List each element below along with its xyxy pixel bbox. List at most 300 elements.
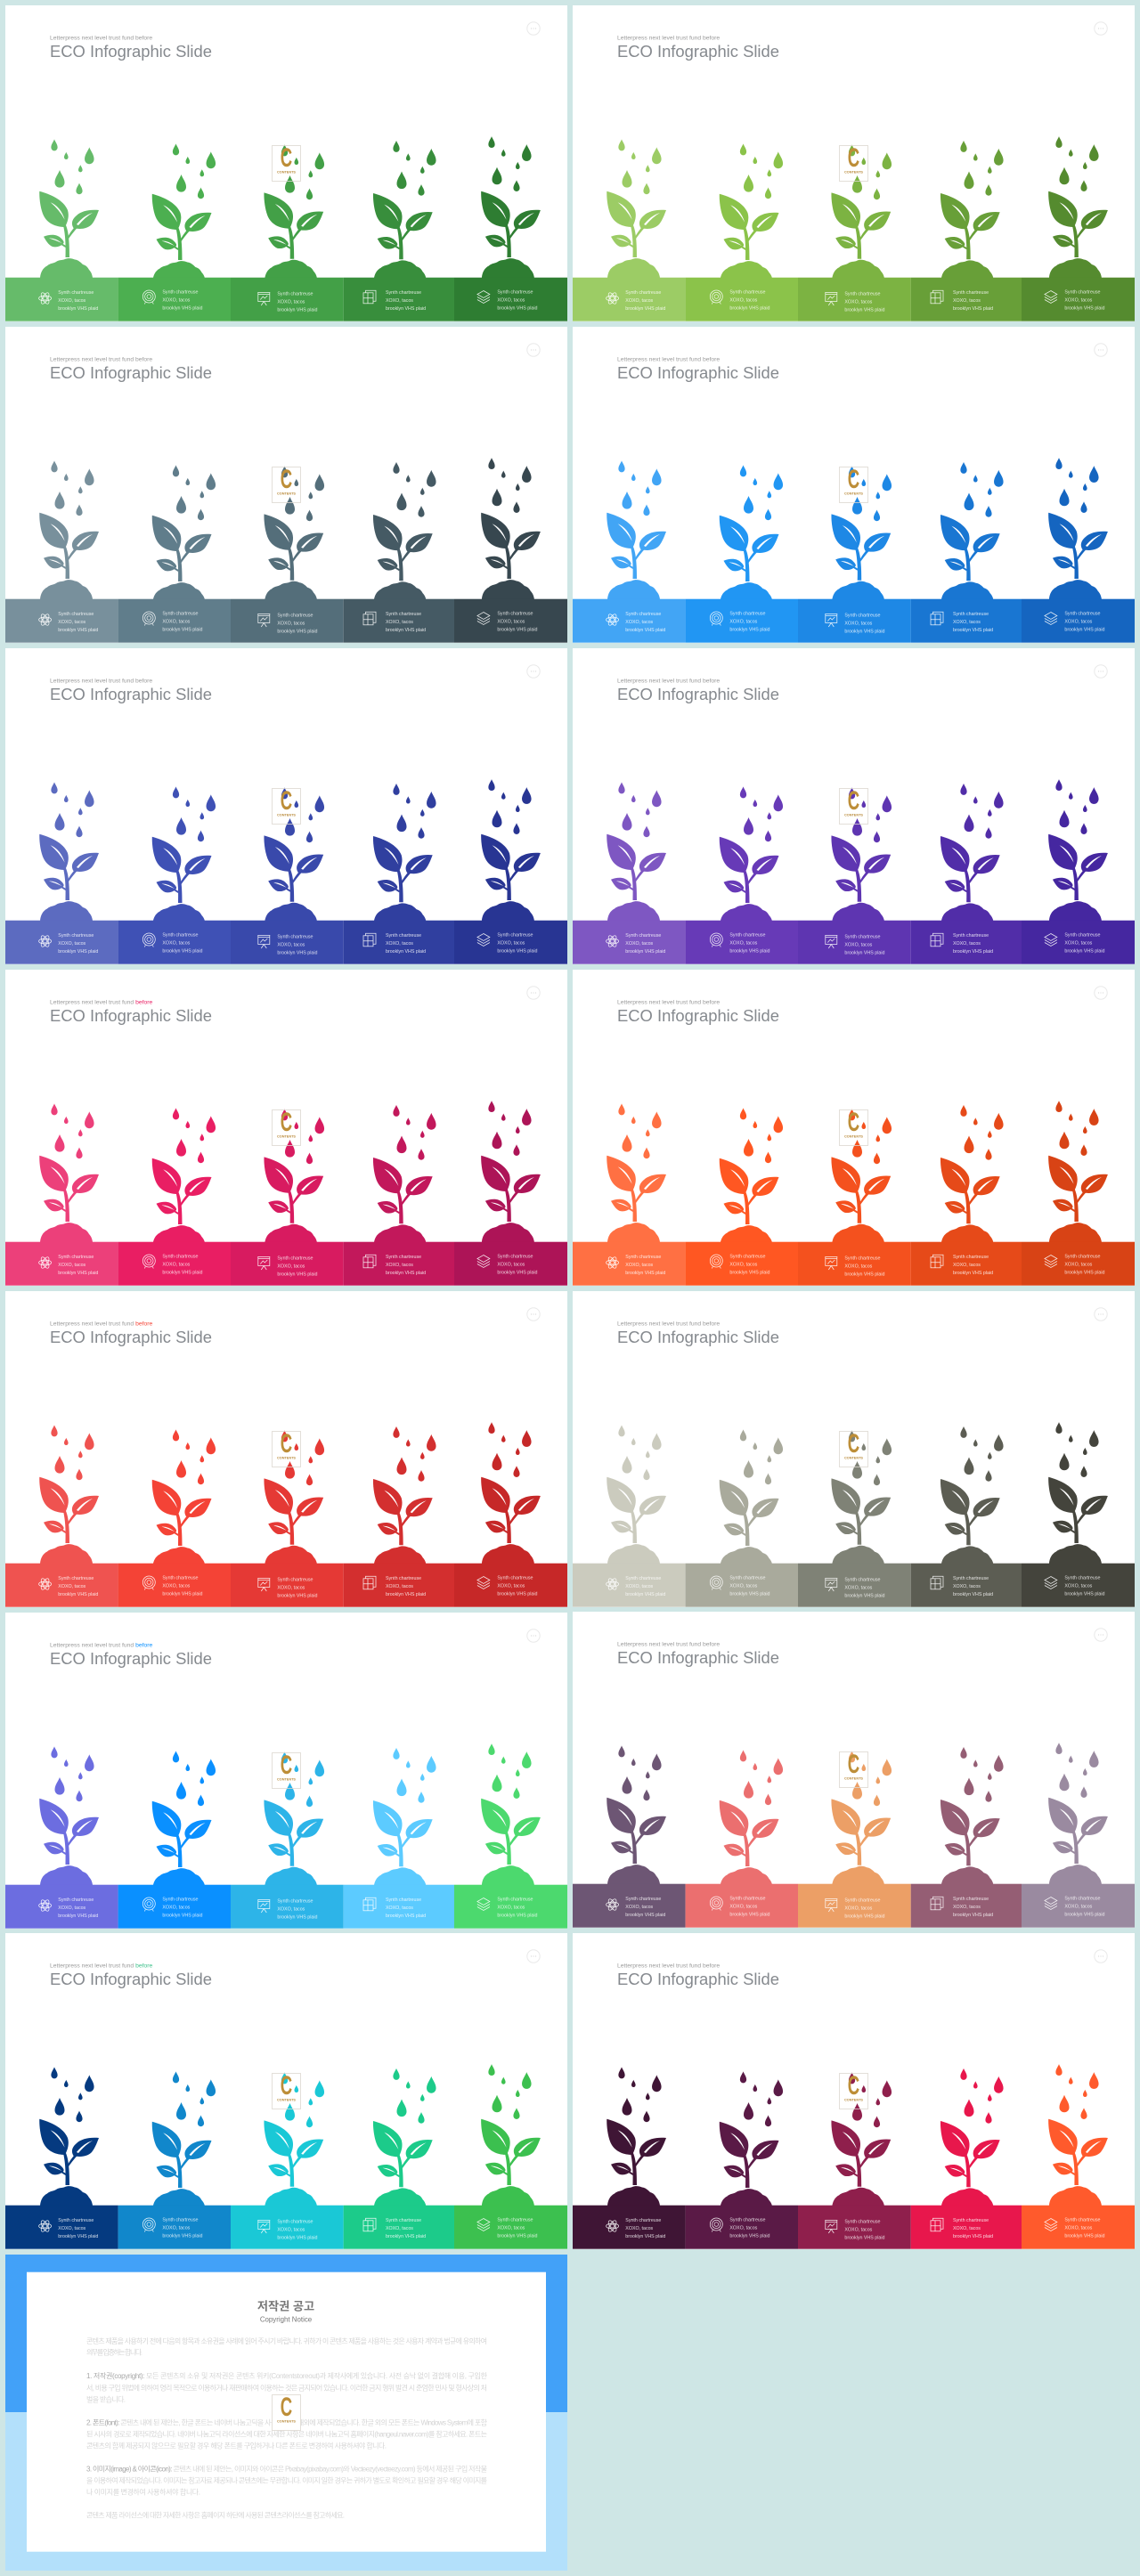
footer cell 2 xyxy=(118,599,231,643)
footer cell 2: brooklyn VHS plaid xyxy=(162,1270,203,1275)
footer cell 3 xyxy=(231,921,344,964)
footer cell 4: XOXO, tacos xyxy=(953,2226,981,2231)
footer cell 2: brooklyn VHS plaid xyxy=(729,1912,770,1917)
watermark xyxy=(273,465,301,502)
slide 7: pink xyxy=(5,970,567,1286)
watermark: C xyxy=(281,786,292,816)
footer cell 5: XOXO, tacos xyxy=(497,1262,525,1267)
footer cell 2: XOXO, tacos xyxy=(729,297,758,303)
footer cell 1: XOXO, tacos xyxy=(58,2226,86,2231)
footer cell 4: Synth chartreuse xyxy=(953,612,989,617)
plant 3 xyxy=(831,1109,892,1244)
footer cell 1: Synth chartreuse xyxy=(625,1576,661,1581)
plant 4 xyxy=(373,1105,436,1244)
footer cell 2: brooklyn VHS plaid xyxy=(729,948,770,954)
slide 12: muted plum and coral xyxy=(573,1612,1135,1928)
paragraph: images and icons: 을 이용하여 제작되었습니다. 이미지는 참고자료 제공되나 콘텐츠에는 무관합니다. 이미지 일한 경우는 귀하가 별도로 확인하고 필요할 경우 해당 이미지를 xyxy=(86,2476,487,2485)
footer cell 5: XOXO, tacos xyxy=(1064,297,1093,303)
footer cell 4: Synth chartreuse xyxy=(953,1576,989,1581)
footer cell 4: XOXO, tacos xyxy=(386,620,413,625)
footer cell 1: brooklyn VHS plaid xyxy=(58,949,98,955)
watermark: C xyxy=(848,1429,859,1459)
footer cell 5: brooklyn VHS plaid xyxy=(1064,1591,1105,1597)
paragraph: images and icons: 3. 이미지(image) & 아이콘(icon): 콘텐츠 내에 된 제안는, 이미지와 아이콘은 Pixabay(pixabay.com)와 Vecteezy(vecteezy.com) 등에서 제공된 구입 저작물 xyxy=(86,2464,487,2473)
watermark xyxy=(273,786,301,825)
plant 3 xyxy=(831,144,892,280)
footer cell 1: brooklyn VHS plaid xyxy=(58,2234,98,2239)
footer cell 5: XOXO, tacos xyxy=(1064,1583,1093,1589)
footer cell 2: brooklyn VHS plaid xyxy=(729,2233,770,2239)
copyright heading: 저작권 공고 xyxy=(257,2300,314,2313)
watermark xyxy=(273,143,301,182)
footer cell 5 xyxy=(454,599,567,643)
plant 5 xyxy=(481,1743,541,1885)
footer cell 2: XOXO, tacos xyxy=(162,1262,191,1267)
paragraph: images and icons: 나 이미지를 변경하여 사용하셔야 합니다. xyxy=(86,2487,200,2496)
footer cell 1: brooklyn VHS plaid xyxy=(625,1271,665,1276)
footer cell 4 xyxy=(911,278,1022,321)
footer cell 2: brooklyn VHS plaid xyxy=(729,305,770,311)
footer cell 1: Synth chartreuse xyxy=(625,612,661,617)
footer cell 2: Synth chartreuse xyxy=(729,2217,765,2223)
paragraph: font xyxy=(86,2418,488,2450)
footer cell 4: Synth chartreuse xyxy=(953,1897,989,1902)
footer cell 4: brooklyn VHS plaid xyxy=(953,1592,993,1597)
footer cell 1: brooklyn VHS plaid xyxy=(58,306,98,312)
footer cell 4: Synth chartreuse xyxy=(953,933,989,939)
subtitle: Letterpress next level trust fund before xyxy=(617,1642,720,1647)
footer cell 5: XOXO, tacos xyxy=(1064,1262,1093,1267)
footer cell 4: XOXO, tacos xyxy=(386,1263,413,1268)
footer cell 4 xyxy=(344,921,454,964)
watermark xyxy=(839,1429,867,1467)
footer cell 3 xyxy=(798,599,911,643)
plant 5 xyxy=(1048,1101,1108,1242)
footer cell 2: XOXO, tacos xyxy=(162,1583,191,1589)
watermark: C xyxy=(281,2393,292,2422)
footer cell 1: Synth chartreuse xyxy=(58,1255,94,1260)
plant 2 xyxy=(152,1751,216,1888)
footer cell 2 xyxy=(118,278,231,321)
footer cell 5: Synth chartreuse xyxy=(1064,1254,1100,1259)
footer cell 3: XOXO, tacos xyxy=(844,1585,873,1590)
plant 2 xyxy=(152,786,216,923)
footer cell 5: brooklyn VHS plaid xyxy=(1064,1912,1105,1917)
footer cell 3 xyxy=(231,1564,344,1607)
footer cell 4: brooklyn VHS plaid xyxy=(386,2234,426,2239)
footer cell 4: XOXO, tacos xyxy=(953,1905,981,1910)
plant 5 xyxy=(481,1101,541,1242)
paragraph: images and icons xyxy=(86,2464,487,2496)
watermark: CONTENTS xyxy=(844,1457,863,1460)
paragraph: copyright xyxy=(86,2371,488,2404)
menu icon xyxy=(1095,344,1107,356)
footer cell 1: brooklyn VHS plaid xyxy=(58,1914,98,1919)
footer cell 1: brooklyn VHS plaid xyxy=(625,2234,665,2239)
plant 1 xyxy=(39,1425,99,1564)
footer cell 5: XOXO, tacos xyxy=(1064,2225,1093,2231)
watermark xyxy=(839,2071,867,2109)
footer cell 2 xyxy=(118,1242,231,1286)
footer cell 3: brooklyn VHS plaid xyxy=(277,1593,318,1598)
footer cell 1 xyxy=(5,1564,118,1607)
footer cell 1: brooklyn VHS plaid xyxy=(58,1271,98,1276)
footer cell 1: brooklyn VHS plaid xyxy=(625,306,665,312)
subtitle: Letterpress next level trust fund before xyxy=(50,356,152,363)
footer cell 4: XOXO, tacos xyxy=(386,1906,413,1911)
footer cell 2: XOXO, tacos xyxy=(162,619,191,624)
footer cell 1: brooklyn VHS plaid xyxy=(625,1913,665,1918)
footer cell 5 xyxy=(454,2206,567,2249)
plant 3 xyxy=(264,466,324,601)
footer cell 4: Synth chartreuse xyxy=(386,1576,421,1581)
footer cell 1: XOXO, tacos xyxy=(58,1584,86,1589)
footer cell 3 xyxy=(798,2206,911,2249)
slide 2: light green xyxy=(573,5,1135,321)
footer cell 5: Synth chartreuse xyxy=(1064,932,1100,938)
footer cell 5: Synth chartreuse xyxy=(1064,1575,1100,1581)
footer cell 4: XOXO, tacos xyxy=(386,2226,413,2231)
slide 3: blue grey xyxy=(5,327,567,643)
footer cell 4: Synth chartreuse xyxy=(386,1255,421,1260)
watermark: CONTENTS xyxy=(277,1134,296,1138)
subtitle: Letterpress next level trust fund before xyxy=(50,679,152,684)
subtitle: Letterpress next level trust fund before xyxy=(50,36,152,41)
footer cell 1: brooklyn VHS plaid xyxy=(625,1592,665,1597)
footer cell 1: brooklyn VHS plaid xyxy=(58,628,98,633)
footer cell 3: brooklyn VHS plaid xyxy=(844,1593,885,1598)
footer cell 1 xyxy=(573,1242,686,1286)
plant 3 xyxy=(831,466,892,601)
footer cell 1: brooklyn VHS plaid xyxy=(625,628,665,633)
footer cell 5: Synth chartreuse xyxy=(497,611,533,616)
plant 2 xyxy=(720,1108,783,1245)
plant 4 xyxy=(373,1426,436,1565)
footer cell 3: Synth chartreuse xyxy=(277,1577,313,1582)
footer cell 5: Synth chartreuse xyxy=(497,932,533,938)
footer cell 1: Synth chartreuse xyxy=(58,290,94,296)
watermark: CONTENTS xyxy=(844,1134,863,1138)
menu icon xyxy=(1095,987,1107,999)
footer cell 3 xyxy=(798,1242,911,1286)
footer cell 2: XOXO, tacos xyxy=(162,1905,191,1910)
paragraph: copyright: 서, 비용 구입 위법에 의하여 영리 목적으로 이용하거나 재판매하여 이용하는 것은 금지되어 있습니다. 이러한 금지 행위 발견 시 준엄한 민사 및 형사상의 처 xyxy=(86,2383,487,2392)
footer cell 1 xyxy=(573,1884,686,1928)
paragraph: copyright: 1. 저작권(copyright): 모든 콘텐츠의 소유 및 저작권은 콘텐츠 위키(Contentstoreout)과 제작사에게 있습니다. 사전 승낙 없이 결합해 이용, 구입한 xyxy=(86,2371,488,2380)
watermark xyxy=(273,1108,301,1145)
watermark: CONTENTS xyxy=(844,492,863,495)
footer cell 5: XOXO, tacos xyxy=(1064,1904,1093,1909)
footer cell 2 xyxy=(118,1885,231,1929)
footer cell 2: brooklyn VHS plaid xyxy=(162,948,203,954)
footer cell 5 xyxy=(1022,1884,1135,1928)
footer cell 3 xyxy=(798,1564,911,1607)
footer cell 2: brooklyn VHS plaid xyxy=(162,305,203,311)
footer cell 5 xyxy=(1022,1564,1135,1607)
footer cell 5 xyxy=(1022,921,1135,964)
footer cell 4 xyxy=(344,278,454,321)
watermark: CONTENTS xyxy=(277,2098,296,2101)
menu icon xyxy=(1095,1308,1107,1321)
watermark: C xyxy=(281,1751,292,1780)
footer cell 2: Synth chartreuse xyxy=(162,1575,198,1581)
footer cell 1: XOXO, tacos xyxy=(625,1905,654,1910)
plant 3 xyxy=(264,144,324,280)
footer cell 5: Synth chartreuse xyxy=(497,1254,533,1259)
footer cell 2 xyxy=(686,278,798,321)
footer cell 3 xyxy=(231,1885,344,1929)
footer cell 4: brooklyn VHS plaid xyxy=(386,628,426,633)
plant 1 xyxy=(607,2067,666,2206)
footer cell 4: brooklyn VHS plaid xyxy=(386,306,426,312)
footer cell 4 xyxy=(911,599,1022,643)
plant 1 xyxy=(39,2067,99,2206)
footer cell 4 xyxy=(344,2206,454,2249)
footer cell 1 xyxy=(5,2206,118,2249)
footer cell 3 xyxy=(798,921,911,964)
footer cell 5: XOXO, tacos xyxy=(1064,619,1093,624)
menu icon xyxy=(1095,1950,1107,1962)
footer cell 2: brooklyn VHS plaid xyxy=(729,1591,770,1597)
footer cell 4: XOXO, tacos xyxy=(953,620,981,625)
watermark xyxy=(839,1108,867,1145)
plant 4 xyxy=(373,1748,436,1887)
footer cell 2: Synth chartreuse xyxy=(729,932,765,938)
slide 4: blue xyxy=(573,327,1135,643)
footer cell 2: XOXO, tacos xyxy=(729,940,758,946)
footer cell 3: Synth chartreuse xyxy=(277,1898,313,1904)
footer cell 1: Synth chartreuse xyxy=(625,290,661,296)
footer cell 2: Synth chartreuse xyxy=(162,932,198,938)
plant 1 xyxy=(39,139,99,278)
footer cell 3: XOXO, tacos xyxy=(844,942,873,947)
footer cell 5 xyxy=(1022,599,1135,643)
footer cell 5: XOXO, tacos xyxy=(497,2225,525,2231)
footer cell 2: Synth chartreuse xyxy=(162,1897,198,1902)
footer cell 4: Synth chartreuse xyxy=(386,2218,421,2223)
plant 1 xyxy=(607,1425,666,1564)
footer cell 5: brooklyn VHS plaid xyxy=(1064,948,1105,954)
watermark: CONTENTS xyxy=(277,492,296,495)
footer cell 1: brooklyn VHS plaid xyxy=(625,949,665,955)
footer cell 3: brooklyn VHS plaid xyxy=(844,950,885,955)
slide 1: green xyxy=(5,5,567,321)
plant 4 xyxy=(940,462,1004,601)
title: ECO Infographic Slide xyxy=(617,42,779,61)
footer cell 3: brooklyn VHS plaid xyxy=(277,2235,318,2240)
plant 3 xyxy=(264,1751,324,1887)
plant 2 xyxy=(152,465,216,602)
footer cell 4: Synth chartreuse xyxy=(953,290,989,296)
footer cell 4: XOXO, tacos xyxy=(953,1584,981,1589)
footer cell 2: brooklyn VHS plaid xyxy=(162,627,203,632)
title: ECO Infographic Slide xyxy=(617,1970,779,1988)
footer cell 1: XOXO, tacos xyxy=(625,1584,654,1589)
plant 1 xyxy=(607,1745,666,1884)
footer cell 2: Synth chartreuse xyxy=(162,611,198,616)
plant 5 xyxy=(1048,779,1108,921)
slide 5: indigo xyxy=(5,648,567,964)
footer cell 5: XOXO, tacos xyxy=(1064,940,1093,946)
footer cell 3 xyxy=(798,278,911,321)
footer cell 3: brooklyn VHS plaid xyxy=(277,629,318,634)
paragraph: font: 콘텐츠의 함께 제공되지 않으므로 필요할 경우 해당 폰트를 구입하거나 다른 폰트로 변경하여 사용하셔야 합니다. xyxy=(86,2442,387,2450)
footer cell 1: XOXO, tacos xyxy=(58,1263,86,1268)
watermark xyxy=(273,2071,301,2109)
plant 5 xyxy=(481,136,541,278)
footer cell 1: XOXO, tacos xyxy=(58,941,86,947)
plant 3 xyxy=(831,1751,892,1886)
plant 1 xyxy=(607,139,666,278)
plant 4 xyxy=(940,1747,1004,1886)
footer cell 5: brooklyn VHS plaid xyxy=(1064,1270,1105,1275)
footer cell 2: brooklyn VHS plaid xyxy=(162,1591,203,1597)
footer cell 5: brooklyn VHS plaid xyxy=(497,2233,538,2239)
footer cell 5 xyxy=(454,1242,567,1286)
footer cell 3: Synth chartreuse xyxy=(844,1255,880,1261)
subtitle: Letterpress next level trust fund before xyxy=(617,1962,720,1970)
plant 4 xyxy=(940,1426,1004,1565)
plant 4 xyxy=(373,784,436,922)
paragraph: font: 2. 폰트(font): 콘텐츠 내에 된 제안는, 한글 폰트는 네이버 나눔고딕을 사용합니다. 해외에 제작되었습니다. 한글 외의 모든 폰트는 Windows System에 포함 xyxy=(86,2418,488,2427)
footer cell 2 xyxy=(686,1242,798,1286)
footer cell 3: XOXO, tacos xyxy=(844,2227,873,2232)
watermark: C xyxy=(848,786,859,816)
footer cell 3 xyxy=(798,1884,911,1928)
footer cell 5: Synth chartreuse xyxy=(497,1575,533,1581)
watermark: C xyxy=(281,465,292,494)
subtitle: Letterpress next level trust fund before xyxy=(617,36,720,41)
paragraph: copyright: 벌을 받습니다. xyxy=(86,2395,126,2404)
watermark: CONTENTS xyxy=(277,814,296,817)
footer cell 1 xyxy=(573,921,686,964)
menu icon xyxy=(527,1629,540,1642)
footer cell 5: brooklyn VHS plaid xyxy=(1064,305,1105,311)
plant 5 xyxy=(481,779,541,921)
footer cell 3 xyxy=(231,599,344,643)
plant 5 xyxy=(1048,1743,1108,1884)
plant 2 xyxy=(720,465,783,602)
footer cell 3: XOXO, tacos xyxy=(277,942,305,947)
footer cell 1: Synth chartreuse xyxy=(58,1897,94,1903)
plant 5 xyxy=(481,1422,541,1564)
menu icon xyxy=(527,987,540,999)
footer cell 3: Synth chartreuse xyxy=(277,934,313,939)
footer cell 3 xyxy=(231,278,344,321)
footer cell 1: Synth chartreuse xyxy=(58,612,94,617)
footer cell 5: brooklyn VHS plaid xyxy=(497,1913,538,1918)
footer cell 4: brooklyn VHS plaid xyxy=(953,628,993,633)
footer cell 1: Synth chartreuse xyxy=(625,1255,661,1260)
footer cell 3: Synth chartreuse xyxy=(844,291,880,297)
footer cell 2: brooklyn VHS plaid xyxy=(162,2233,203,2239)
watermark: C xyxy=(281,143,292,173)
footer cell 2 xyxy=(686,599,798,643)
title: ECO Infographic Slide xyxy=(50,1970,212,1988)
footer cell 3: XOXO, tacos xyxy=(844,621,873,626)
footer cell 3: brooklyn VHS plaid xyxy=(844,2235,885,2240)
footer cell 3: Synth chartreuse xyxy=(277,291,313,297)
watermark: CONTENTS xyxy=(844,1777,863,1781)
title: ECO Infographic Slide xyxy=(617,685,779,703)
footer cell 5: Synth chartreuse xyxy=(497,2217,533,2223)
footer cell 2 xyxy=(686,1884,798,1928)
footer cell 1: Synth chartreuse xyxy=(58,1576,94,1581)
footer cell 3: Synth chartreuse xyxy=(844,1897,880,1903)
footer cell 4 xyxy=(344,1242,454,1286)
footer cell 5 xyxy=(454,1564,567,1607)
footer cell 5: XOXO, tacos xyxy=(497,619,525,624)
footer cell 2 xyxy=(686,2206,798,2249)
footer cell 1 xyxy=(5,278,118,321)
footer cell 5: brooklyn VHS plaid xyxy=(497,627,538,632)
subtitle: Letterpress next level trust fund before xyxy=(50,1962,152,1970)
footer cell 4: XOXO, tacos xyxy=(386,1584,413,1589)
footer cell 1: Synth chartreuse xyxy=(625,933,661,939)
slide 9: red xyxy=(5,1291,567,1607)
footer cell 2 xyxy=(118,2206,231,2249)
footer cell 3: brooklyn VHS plaid xyxy=(277,1272,318,1277)
plant 5 xyxy=(1048,2064,1108,2206)
plant 4 xyxy=(940,1105,1004,1244)
footer cell 2: XOXO, tacos xyxy=(729,1904,758,1909)
footer cell 5 xyxy=(454,1885,567,1929)
title: ECO Infographic Slide xyxy=(50,685,212,703)
footer cell 2: Synth chartreuse xyxy=(729,289,765,295)
plant 3 xyxy=(831,787,892,922)
plant 2 xyxy=(720,2071,783,2208)
plant 2 xyxy=(152,1429,216,1566)
footer cell 1: Synth chartreuse xyxy=(58,2218,94,2223)
watermark: CONTENTS xyxy=(277,1777,296,1781)
footer cell 4: XOXO, tacos xyxy=(953,941,981,947)
watermark: C xyxy=(848,2071,859,2101)
intro paragraph: 콘텐츠 제품을 사용하기 전에 다음의 항목과 소유권을 사례에 읽어 주시기 바랍니다. 귀하가 이 콘텐츠 제품을 사용하는 것은 사용자 계약과 법규에 유의하여 xyxy=(86,2336,487,2345)
footer cell 3: XOXO, tacos xyxy=(277,621,305,626)
plant 2 xyxy=(152,2071,216,2208)
footer cell 4: brooklyn VHS plaid xyxy=(953,1913,993,1918)
footer cell 5 xyxy=(454,921,567,964)
menu icon xyxy=(1095,22,1107,35)
footer cell 5: Synth chartreuse xyxy=(1064,1896,1100,1901)
plant 4 xyxy=(373,141,436,280)
footer cell 1: XOXO, tacos xyxy=(625,2226,654,2231)
footer cell 4: XOXO, tacos xyxy=(953,1263,981,1268)
watermark xyxy=(273,1429,301,1467)
slide 15: copyright notice xyxy=(5,2255,567,2571)
footer cell 3: Synth chartreuse xyxy=(277,2219,313,2224)
footer cell 3: brooklyn VHS plaid xyxy=(844,1272,885,1277)
title: ECO Infographic Slide xyxy=(617,1006,779,1025)
slide 10: warm grey xyxy=(573,1291,1135,1607)
plant 3 xyxy=(264,1430,324,1565)
footer cell 2: XOXO, tacos xyxy=(729,1583,758,1589)
footer cell 1: XOXO, tacos xyxy=(625,1263,654,1268)
title: ECO Infographic Slide xyxy=(617,1328,779,1346)
footer cell 4: Synth chartreuse xyxy=(386,1897,421,1903)
plant 1 xyxy=(39,1103,99,1242)
footer cell 5: brooklyn VHS plaid xyxy=(497,948,538,954)
footer cell 5: XOXO, tacos xyxy=(497,940,525,946)
footer cell 3 xyxy=(231,2206,344,2249)
plant 4 xyxy=(940,2068,1004,2207)
footer cell 5: XOXO, tacos xyxy=(497,1583,525,1589)
intro paragraph: 의무를 입증하는 합니다. xyxy=(86,2348,142,2357)
footer cell 2 xyxy=(686,921,798,964)
footer cell 3: brooklyn VHS plaid xyxy=(844,307,885,313)
plant 2 xyxy=(720,1750,783,1887)
subtitle: Letterpress next level trust fund before xyxy=(50,1321,152,1327)
